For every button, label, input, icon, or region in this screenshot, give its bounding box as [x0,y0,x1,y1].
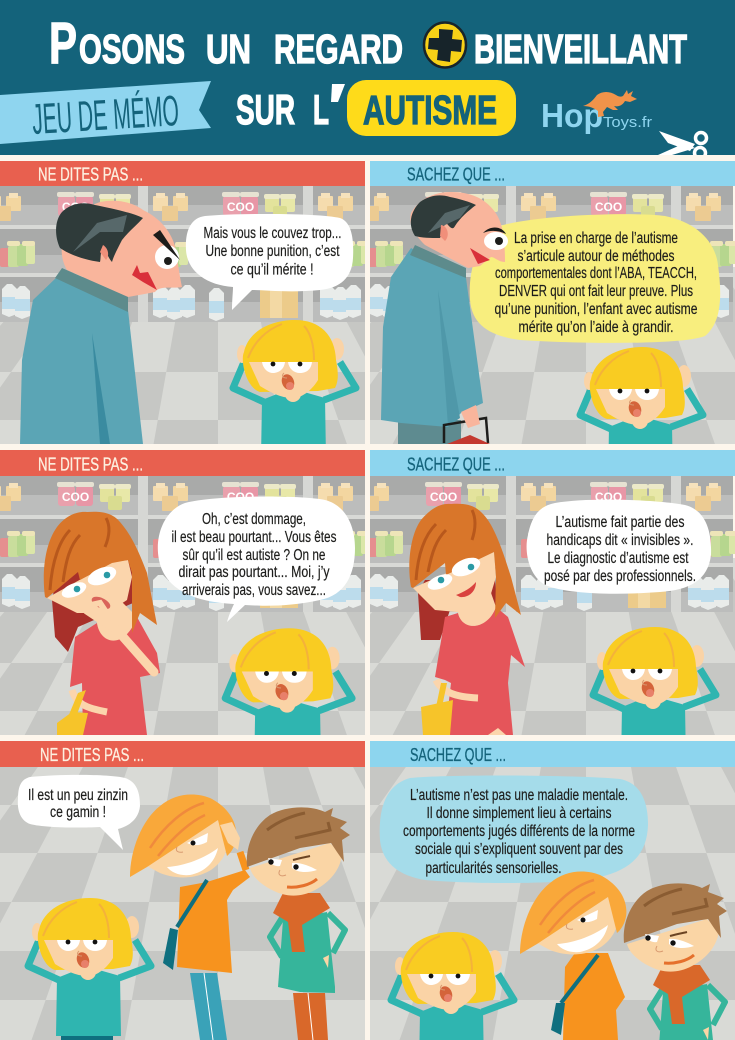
speech bubble: ce qu’il mérite ! [230,262,314,278]
scene: mocking teens and child [0,767,365,1040]
logo: HopToys: Toys.fr [603,114,652,131]
heading bar [0,741,365,767]
figure: brown-haired teen [247,807,350,1040]
figure: man head [410,192,508,268]
figure: smiling woman [409,504,525,735]
figure: man body [381,245,490,444]
speech bubble [470,214,720,343]
speech bubble: sûr qu’il est autiste ? On ne [182,547,326,564]
speech bubble: il est beau pourtant... Vous êtes [172,529,337,546]
speech bubble: s’articule autour de méthodes [518,248,675,265]
speech bubble: Une bonne punition, c’est [206,243,340,260]
figure: shocked woman [44,512,160,735]
speech bubble [186,214,353,310]
panel: sachez que 3 [370,741,735,1040]
speech bubble: sociale qui s’expliquent souvent par des [415,841,623,858]
panel: sachez que 2 [370,450,735,735]
speech bubble: Oh, c’est dommage, [202,511,306,528]
scene: teens and child [370,767,735,1040]
heading bar: SACHEZ QUE ... [407,164,505,184]
panel: ne dites pas 3 [0,741,365,1040]
speech bubble: comportements jugés différents de la norme [403,823,635,840]
speech bubble: dirait pas pourtant... Moi, j’y [178,564,330,581]
speech bubble: L’autisme fait partie des [556,514,685,531]
ribbon: jeu de mémo: JEU DE MÉMO [31,87,180,144]
title line 1: P [49,11,77,76]
scene: angry man and child in shop [0,186,365,444]
title line 1: REGARD [274,26,403,72]
header banner [0,0,735,161]
speech bubble: handicaps dit « invisibles ». [546,532,694,549]
logo: HopToys [541,90,652,134]
heading bar: SACHEZ QUE ... [407,454,505,474]
speech bubble: Il donne simplement lieu à certains [426,805,612,822]
figure: angry man [20,201,182,444]
figure: brown-haired teen [624,883,727,1040]
speech bubble: Le diagnostic d’autisme est [548,550,689,567]
figure: orange teen [130,794,250,1040]
heading bar: SACHEZ QUE ... [410,744,506,765]
ribbon: jeu de mémo [0,81,211,144]
heading bar [370,741,735,767]
speech bubble [158,497,355,622]
speech bubble [527,500,711,594]
title line 1: OSONS [79,26,185,72]
heading bar: NE DITES PAS ... [40,744,144,765]
speech bubble: Il est un peu zinzin [28,787,128,804]
scene: smiling woman and child [370,476,735,735]
highlight pill: autisme [347,80,516,136]
speech bubble: particularités sensorielles. [426,860,562,877]
figure: orange teen [520,871,626,1040]
panel: sachez que 1 [370,161,735,444]
heading bar: NE DITES PAS ... [38,164,143,184]
scene: calm man and child in shop [370,186,735,444]
title line 1 [49,11,687,76]
speech bubble [18,775,140,850]
heading bar [370,161,735,186]
speech bubble: mérite qu’on l’aide à grandir. [518,319,674,336]
heading bar [0,161,365,186]
panel: ne dites pas 1 [0,161,365,444]
speech bubble: L’autisme n’est pas une maladie mentale. [410,787,628,804]
icon: scissors [650,131,720,161]
logo: HopToys: Hop [541,97,603,134]
speech bubble: arriverais pas, vous savez... [182,582,326,599]
heading bar [370,450,735,476]
highlight pill: autisme: AUTISME [363,87,497,133]
heading bar: NE DITES PAS ... [38,454,143,474]
speech bubble: La prise en charge de l’autisme [514,230,678,247]
panel: ne dites pas 2 [0,450,365,735]
title line 1: UN [206,26,251,72]
title line 2: L [313,86,329,133]
title line 2: SUR [236,86,295,133]
speech bubble [380,775,648,883]
speech bubble: Mais vous le couvez trop... [204,225,342,242]
speech bubble: ce gamin ! [50,804,106,821]
icon: plus badge [424,22,466,68]
scene: shocked woman and child [0,476,365,735]
heading bar [0,450,365,476]
